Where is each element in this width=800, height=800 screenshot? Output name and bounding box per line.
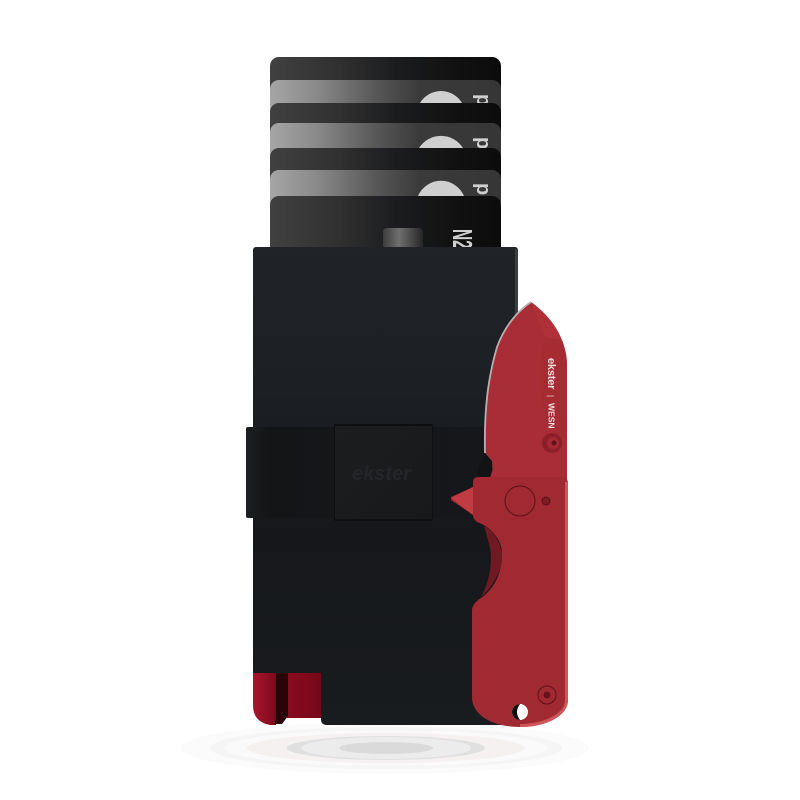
- blade engraving: [545, 358, 557, 428]
- blade engraving: WESN: [546, 403, 556, 428]
- red card ejector lever: [253, 673, 321, 725]
- handle recess: [481, 526, 502, 597]
- lanyard hole: [512, 704, 528, 720]
- card 6: [270, 170, 501, 210]
- band tab with logo: [334, 424, 433, 521]
- card 4: p: [472, 137, 494, 149]
- knife blade: [478, 302, 567, 482]
- knife handle: [451, 477, 568, 727]
- card 7: [270, 196, 501, 256]
- small stud: [542, 497, 550, 505]
- stack of cards: [270, 57, 501, 256]
- finger guard shading: [451, 487, 473, 515]
- blade engraving: |: [546, 395, 555, 397]
- blade pivot screw: [542, 433, 562, 453]
- card 2: [270, 80, 501, 120]
- card 2: p: [472, 94, 494, 106]
- lanyard screw: [538, 686, 556, 704]
- wallet body: [253, 247, 518, 725]
- thumb stud circle: [505, 486, 535, 516]
- card 3: [270, 103, 501, 143]
- band tab with logo: ekster: [352, 463, 412, 485]
- blade engraving: ekster: [545, 358, 557, 390]
- ground shadow: [181, 722, 589, 774]
- handle highlight edge: [520, 482, 566, 726]
- card 7: N2: [447, 229, 478, 249]
- card 4: [270, 123, 501, 163]
- card 1: [270, 57, 501, 117]
- pocket knife: [451, 302, 568, 727]
- card 5: [270, 148, 501, 188]
- card 6: p: [472, 183, 494, 195]
- elastic band: [246, 427, 486, 518]
